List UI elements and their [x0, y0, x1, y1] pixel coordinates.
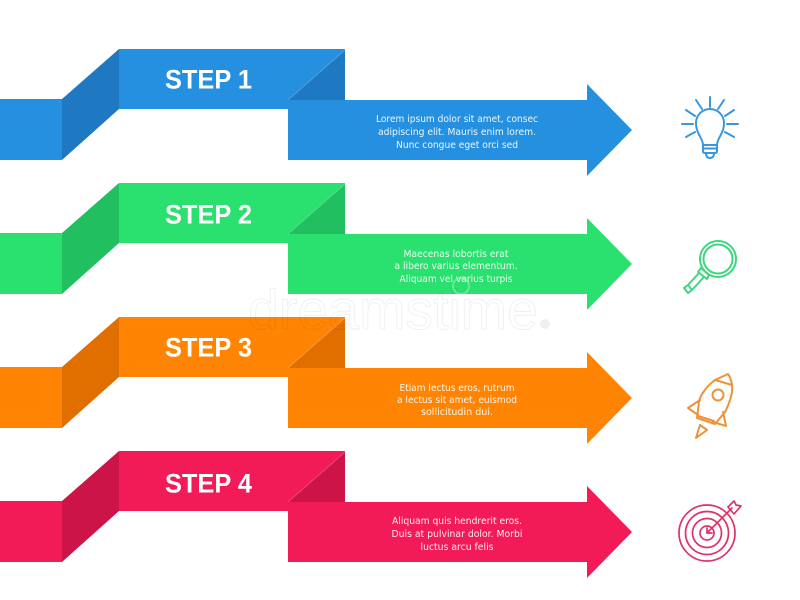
text block: step 3: a lectus sit amet, euismod: [397, 395, 517, 406]
arrow body: [288, 84, 632, 176]
arrow body: [288, 486, 632, 578]
text block: step 3: Etiam lectus eros, rutrum: [400, 383, 514, 394]
text block: step 3: sollicitudin dui.: [421, 407, 493, 418]
text block: step 1: Lorem ipsum dolor sit amet, consec: [376, 114, 538, 125]
ribbon back triangle: [288, 318, 345, 368]
ribbon fold: [62, 49, 119, 160]
ribbon back triangle: [288, 50, 345, 100]
ribbon left block: [0, 367, 62, 428]
ribbon fold: [62, 317, 119, 428]
heading: step 1: STEP 1: [165, 64, 252, 94]
text block: step 2: Maecenas lobortis erat: [404, 249, 509, 260]
ribbon back triangle: [288, 452, 345, 502]
ribbon top band: [119, 317, 345, 377]
heading: step 3: STEP 3: [165, 332, 252, 362]
text block: step 2: Aliquam vel varius turpis: [400, 274, 513, 285]
arrow body: [288, 218, 632, 310]
text block: step 4: [392, 516, 522, 553]
text block: step 3: [397, 383, 517, 418]
ribbon left block: [0, 233, 62, 294]
arrow body: [288, 352, 632, 444]
ribbon top band: [119, 183, 345, 243]
icon: light bulb: [682, 97, 738, 158]
text block: step 2: [394, 249, 518, 285]
ribbon fold: [62, 183, 119, 294]
icon: rocket: [688, 374, 732, 438]
text block: step 2: a libero varius elementum.: [394, 261, 518, 272]
text block: step 4: Duis at pulvinar dolor. Morbi: [392, 529, 522, 540]
row 2: green arrow: [0, 183, 632, 310]
heading: step 4: STEP 4: [165, 468, 252, 498]
text block: step 1: [376, 114, 538, 151]
ribbon left block: [0, 99, 62, 160]
text block: step 1: Nunc congue eget orci sed: [396, 140, 518, 151]
ribbon top band: [119, 451, 345, 511]
watermark: dreamstime: [248, 278, 538, 341]
text block: step 4: luctus arcu felis: [420, 542, 494, 553]
icon: magnifying glass: [684, 241, 736, 293]
row 1: blue arrow: [0, 49, 632, 176]
heading: step 2: STEP 2: [165, 200, 252, 230]
icon: target with arrow: [679, 501, 741, 561]
ribbon top band: [119, 49, 345, 109]
ribbon back triangle: [288, 184, 345, 234]
ribbon fold: [62, 451, 119, 562]
row 3: orange arrow: [0, 317, 632, 444]
row 4: pink arrow: [0, 451, 632, 578]
text block: step 1: adipiscing elit. Mauris enim lorem.: [378, 127, 536, 138]
ribbon left block: [0, 501, 62, 562]
text block: step 4: Aliquam quis hendrerit eros.: [392, 516, 522, 527]
